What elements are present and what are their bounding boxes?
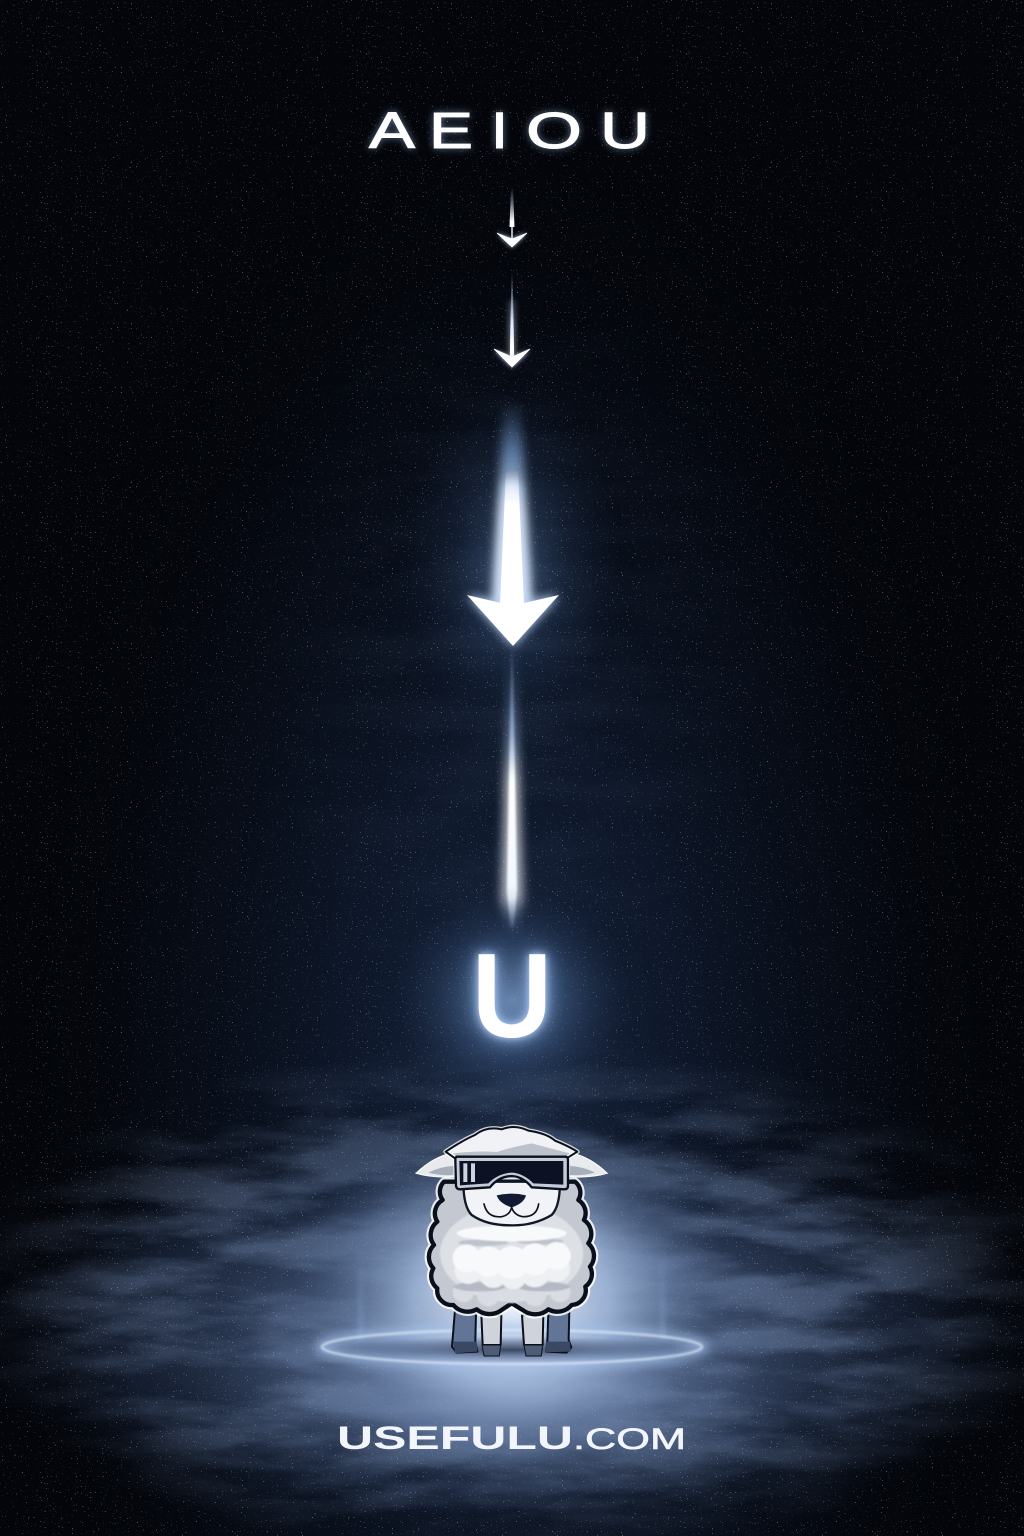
title: AEIOU: I bbox=[491, 102, 508, 159]
sheep VR visor bbox=[455, 1157, 568, 1189]
big glowing letter U: U bbox=[472, 929, 552, 1063]
glowing ground ring bbox=[320, 1329, 704, 1365]
sheep body wool bbox=[429, 1182, 594, 1314]
sheep head wool bbox=[446, 1127, 577, 1158]
website text: USEFULU.COM bbox=[337, 1420, 686, 1456]
sheep ears bbox=[416, 1153, 607, 1177]
mascot: sheep with visor bbox=[416, 1127, 607, 1356]
arrow: large glowing arrow bbox=[467, 400, 559, 646]
light rays and halo behind sheep bbox=[280, 1100, 744, 1490]
arrow: second arrow bbox=[494, 272, 530, 367]
title: AEIOU bbox=[369, 102, 650, 159]
title: AEIOU: E bbox=[429, 102, 473, 159]
title: AEIOU: U bbox=[600, 102, 650, 159]
sheep legs bbox=[452, 1310, 571, 1356]
big glowing letter U bbox=[390, 885, 634, 1115]
title: AEIOU: O bbox=[526, 102, 582, 159]
title: AEIOU: U bbox=[600, 102, 650, 159]
sheep face bbox=[463, 1182, 560, 1225]
title: AEIOU: A bbox=[369, 102, 415, 159]
big glowing letter U: U bbox=[472, 929, 552, 1063]
title: AEIOU: E bbox=[429, 102, 473, 159]
title: AEIOU: O bbox=[526, 102, 582, 159]
light beam to U bbox=[501, 650, 523, 945]
title: AEIOU: A bbox=[369, 102, 415, 159]
arrow: small top arrow bbox=[497, 187, 527, 247]
website text: USEFULU.COM: USEFULU bbox=[337, 1420, 573, 1456]
website text: USEFULU.COM: .COM bbox=[573, 1423, 686, 1456]
title: AEIOU: I bbox=[491, 102, 508, 159]
big glowing letter U: U bbox=[472, 929, 552, 1063]
